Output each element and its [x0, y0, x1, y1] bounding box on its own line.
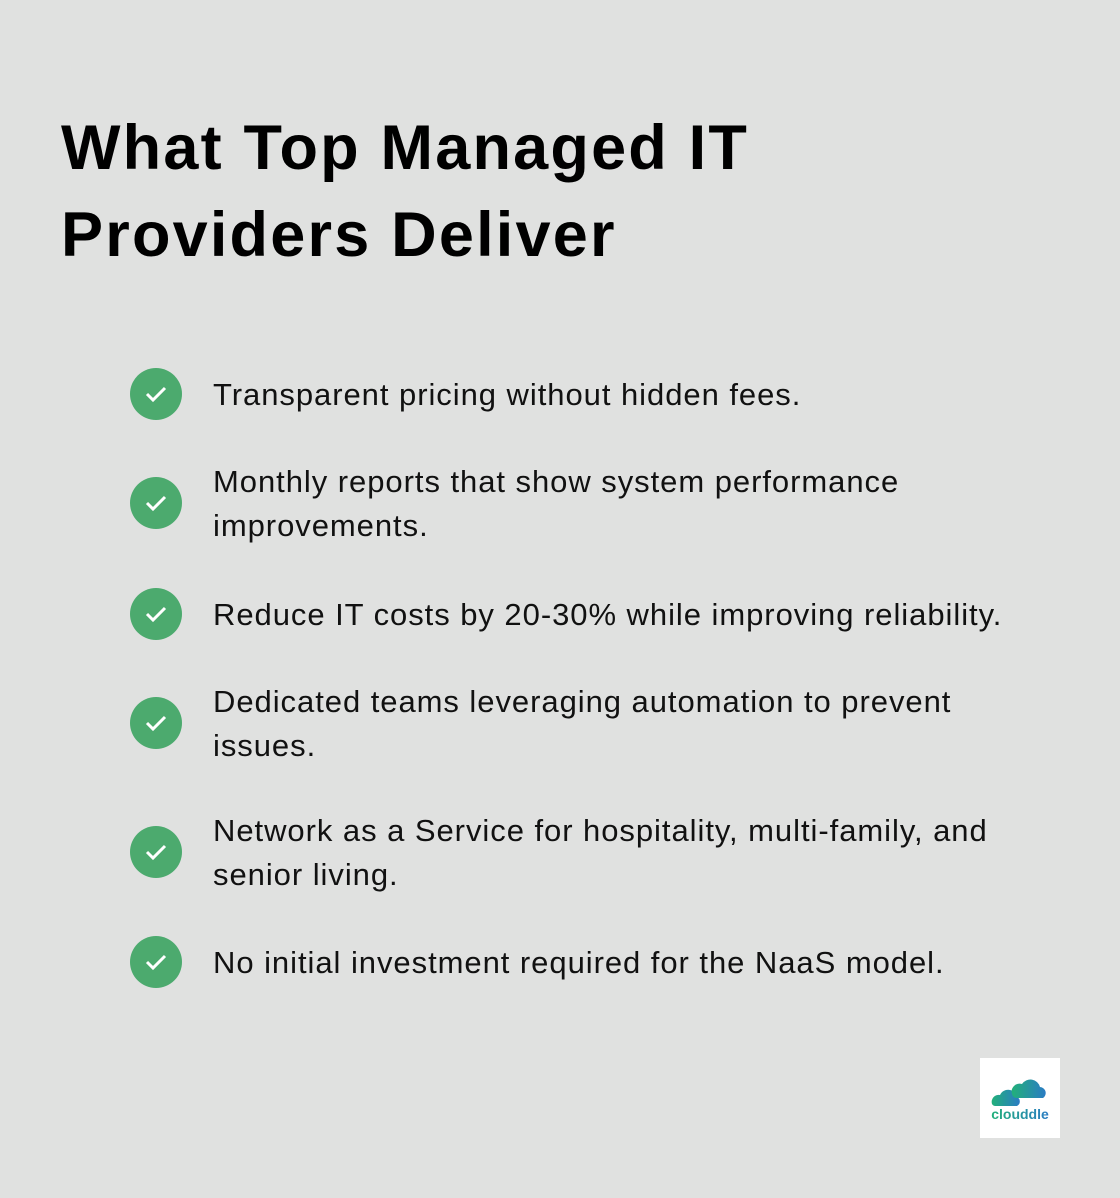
item 2: Monthly reports that show system performance [213, 464, 899, 499]
item 5: Network as a Service for hospitality, multi-family, and [213, 813, 988, 848]
logo [980, 1058, 1060, 1138]
item 5 [130, 813, 988, 892]
item 2 [130, 464, 899, 543]
item 4: issues. [213, 728, 316, 763]
title: What Top Managed IT [61, 113, 749, 183]
logo: clouddle [991, 1106, 1049, 1122]
title [61, 113, 749, 270]
item 1: Transparent pricing without hidden fees. [213, 377, 801, 412]
item 6: No initial investment required for the NaaS model. [213, 945, 945, 980]
item 4 [130, 684, 951, 763]
item 3 [130, 588, 1002, 640]
title: Providers Deliver [61, 200, 617, 270]
item 6 [130, 936, 945, 988]
item 1 [130, 368, 801, 420]
item 5: senior living. [213, 857, 399, 892]
item 2: improvements. [213, 508, 429, 543]
item 3: Reduce IT costs by 20-30% while improving reliability. [213, 597, 1002, 632]
item 4: Dedicated teams leveraging automation to prevent [213, 684, 951, 719]
